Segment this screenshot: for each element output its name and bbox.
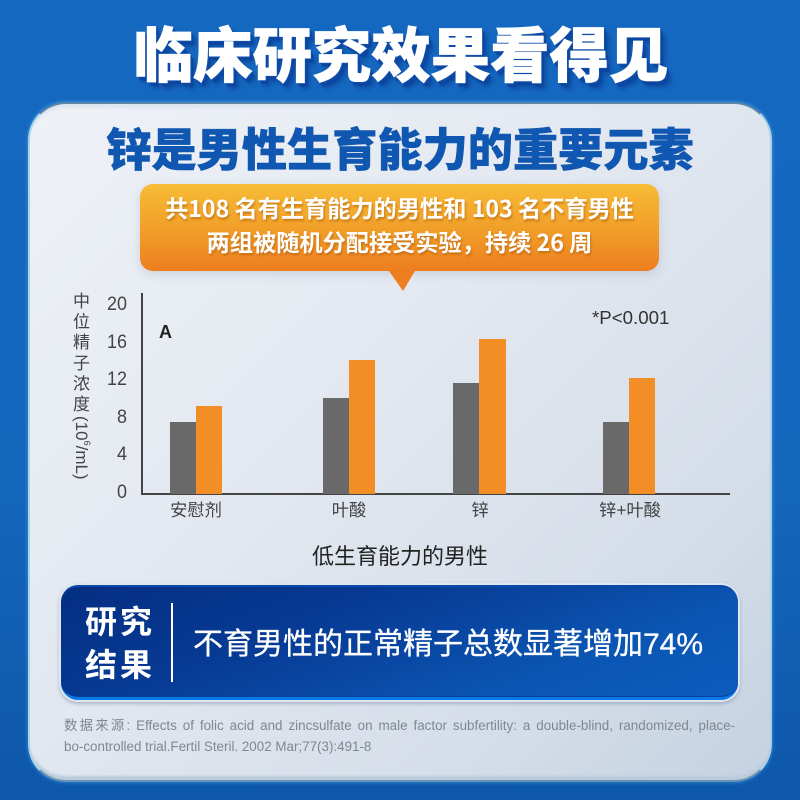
bar grey [453, 383, 479, 494]
result divider [171, 603, 173, 682]
callout [137, 184, 662, 291]
footnote line 2: bo-controlled trial.Fertil Steril. 2002 Mar;77(3):491-8 [64, 739, 371, 754]
x axis line [141, 493, 730, 494]
callout text line 2: 两组被随机分配接受实验，持续 26 周 [207, 224, 592, 258]
significance note: *P<0.001 [592, 307, 669, 328]
bars: placebo [170, 406, 222, 494]
bar orange [479, 339, 506, 494]
result label: 结果 [85, 640, 155, 686]
title: 临床研究效果看得见 [134, 9, 668, 95]
callout text line 1: 共108 名有生育能力的男性和 103 名不育男性 [165, 190, 634, 224]
x axis title: 低生育能力的男性 [312, 539, 488, 571]
x label zinc + folic acid: 锌+叶酸 [599, 500, 661, 520]
y tick 16: 16 [107, 331, 127, 353]
bar grey [170, 422, 196, 494]
footnote [64, 718, 735, 754]
y tick 12: 12 [107, 368, 127, 390]
bar chart [141, 293, 730, 495]
result text: 不育男性的正常精子总数显著增加74% [193, 628, 703, 661]
y axis title: 中位精子浓度 (10 6 /mL) [69, 292, 94, 479]
y tick 20: 20 [107, 293, 127, 315]
y tick 0: 0 [117, 481, 127, 503]
x label zinc: 锌 [471, 500, 489, 520]
y axis line [141, 293, 142, 494]
bar orange [349, 360, 375, 494]
bars: zinc + folic acid [603, 378, 655, 494]
result label: 研究 [85, 597, 155, 643]
bar grey [323, 398, 349, 494]
y tick 4: 4 [117, 443, 127, 465]
callout bubble [140, 184, 659, 271]
panel letter A: A [159, 322, 172, 342]
x label folic acid: 叶酸 [332, 500, 366, 520]
bar orange [629, 378, 655, 494]
x label placebo: 安慰剂 [170, 500, 222, 520]
y tick 8: 8 [117, 406, 127, 428]
heading: 锌是男性生育能力的重要元素 [106, 115, 694, 180]
panel: main card [28, 102, 772, 782]
footnote line 1: 数据来源: Effects of folic acid and zincsulfate on male factor subfertility: a double-blind, randomized, place- [64, 718, 735, 733]
bar grey [603, 422, 629, 494]
bars: folic acid [323, 360, 375, 494]
result label [85, 597, 155, 686]
callout pointer [389, 271, 415, 291]
panel: study result [61, 585, 738, 700]
bars: zinc [453, 339, 506, 494]
bar orange [196, 406, 222, 494]
